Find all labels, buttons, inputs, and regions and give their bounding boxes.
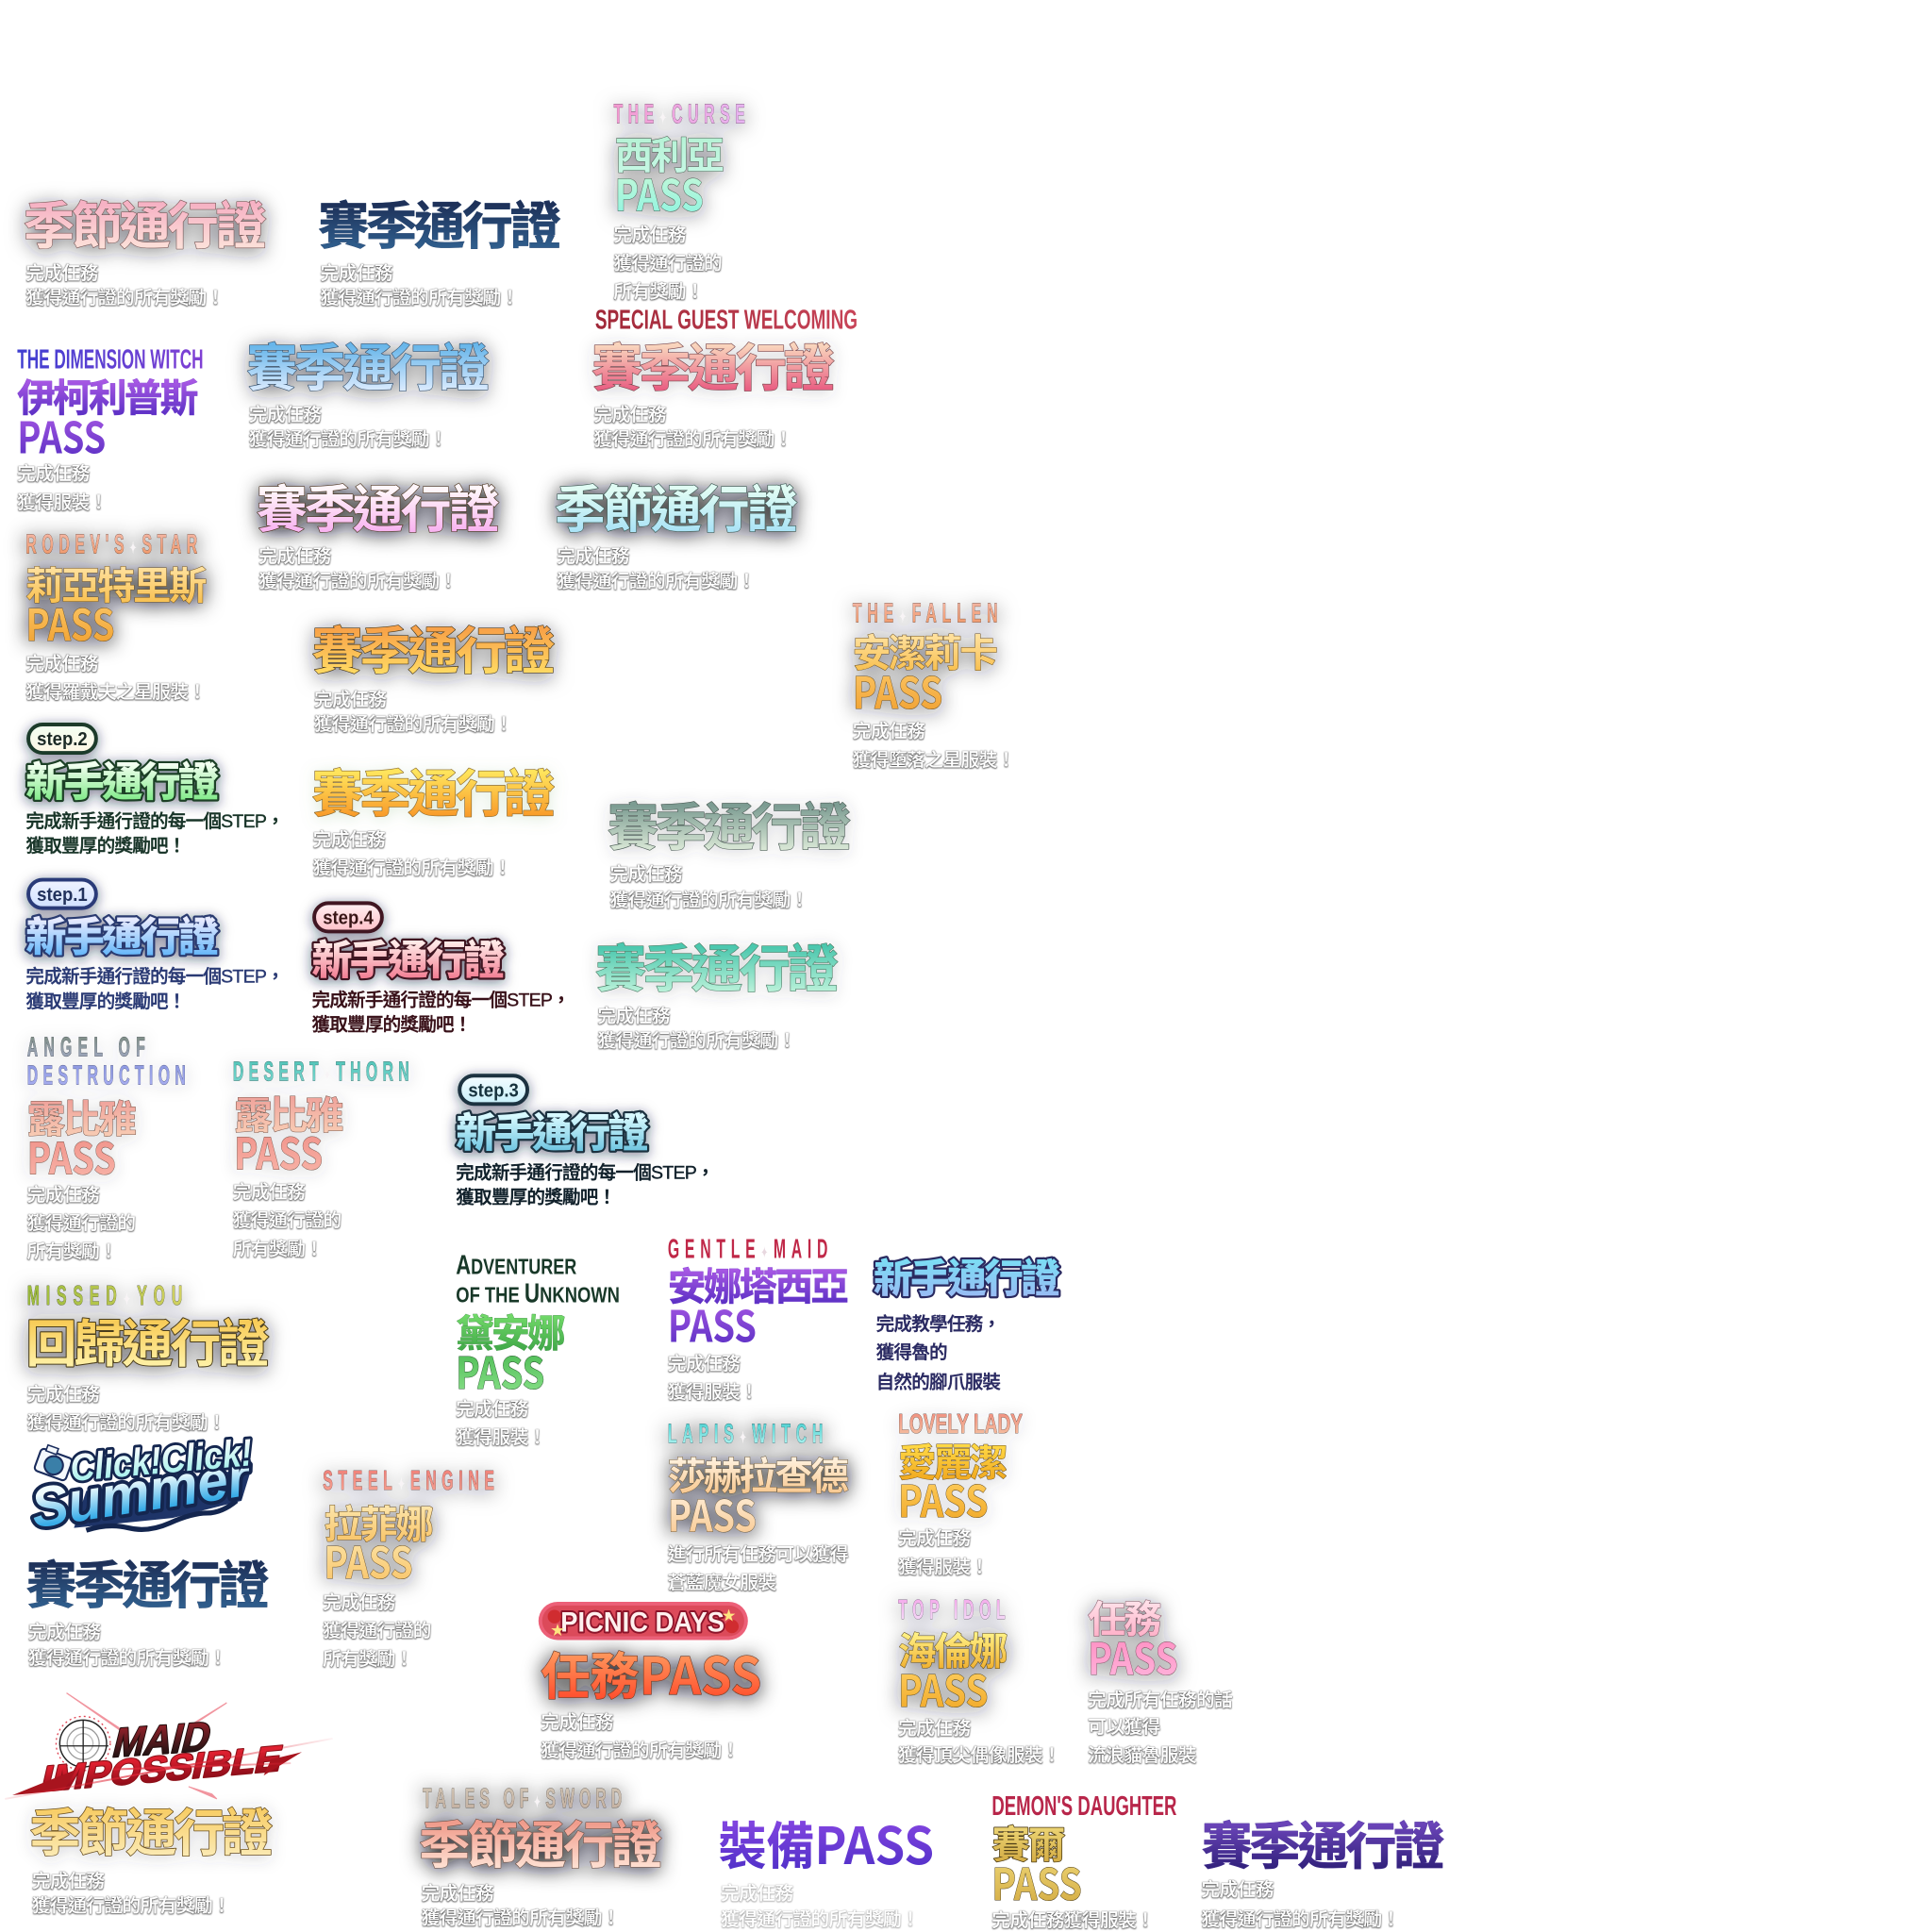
description: 完成任務	[898, 1718, 972, 1739]
description: 獲得通行證的所有獎勵！	[610, 891, 808, 911]
description: 獲取豐厚的獎勵吧！	[456, 1187, 615, 1208]
heading group	[1088, 1598, 1178, 1688]
title: 新手通行證	[456, 1111, 649, 1157]
label: LOVELY LADY	[898, 1409, 1023, 1440]
heading group	[898, 1409, 1023, 1530]
description: 完成任務	[422, 1883, 494, 1904]
description: 流浪貓魯服裝	[1088, 1745, 1196, 1766]
pass word: PASS	[1088, 1625, 1178, 1688]
logo: click click summer	[26, 1430, 257, 1540]
label: RODEV'S ✦ STAR	[25, 528, 197, 559]
description: 完成任務	[898, 1528, 972, 1549]
description: 完成新手通行證的每一個STEP，	[25, 811, 284, 832]
heading group	[25, 880, 219, 960]
heading group	[668, 1418, 848, 1545]
description: 完成所有任務的話	[1088, 1690, 1232, 1710]
heading: 季節通行證	[555, 482, 797, 539]
description: 完成任務	[1201, 1879, 1274, 1900]
name: 愛麗潔	[898, 1441, 1007, 1485]
pass: the dimension witch	[17, 345, 204, 513]
heading group	[613, 99, 745, 224]
step badge	[28, 880, 96, 908]
pass: equipment pass	[718, 1805, 934, 1930]
name: 拉菲娜	[325, 1503, 433, 1546]
description: 獲得通行證的	[613, 253, 722, 274]
label: THE ✦ FALLEN	[853, 598, 998, 628]
description: 獲得通行證的所有獎勵！	[313, 858, 511, 879]
description: 獲得通行證的所有獎勵！	[249, 429, 447, 450]
description: 完成任務	[594, 405, 667, 425]
pass: step 3 beginner	[456, 1075, 714, 1208]
click text: Click!Click!	[69, 1430, 254, 1490]
name: 露比雅	[234, 1093, 342, 1137]
pass: angel of destruction	[27, 1031, 186, 1262]
label line 1: ADVENTURER	[456, 1251, 576, 1281]
description: 完成新手通行證的每一個STEP，	[25, 967, 284, 988]
pass: teal season pass	[595, 941, 839, 1052]
title: 新手通行證	[311, 939, 505, 984]
pass word: PASS	[668, 1483, 757, 1545]
description: 完成任務	[233, 1182, 306, 1203]
pass: navy season pass with summer logo	[25, 1557, 269, 1669]
description: 所有獎勵！	[233, 1239, 323, 1259]
description: 完成新手通行證的每一個STEP，	[311, 990, 570, 1010]
description: 獲得通行證的所有獎勵！	[27, 1412, 225, 1433]
label line 2: DESTRUCTION	[27, 1059, 186, 1091]
title: 回歸通行證	[25, 1316, 269, 1373]
name: 莎赫拉查德	[668, 1455, 848, 1498]
pass: aqua season pass	[555, 482, 797, 591]
name: 賽爾	[991, 1824, 1065, 1867]
wave	[86, 1501, 237, 1530]
description: 完成任務獲得服裝！	[991, 1910, 1155, 1931]
description: 完成任務	[25, 263, 99, 284]
description: 完成任務	[258, 546, 332, 567]
description: 獲得通行證的所有獎勵！	[597, 1031, 796, 1052]
pass: tutorial beginner pass	[874, 1257, 1060, 1392]
description: 完成任務	[27, 1384, 100, 1405]
label line 2: OF THE UNKNOWN	[456, 1279, 620, 1309]
step badge: step.3	[468, 1080, 519, 1101]
description: 獲得頂尖偶像服裝！	[898, 1745, 1060, 1766]
heading: 賽季通行證	[591, 341, 835, 397]
description: 完成任務	[323, 1592, 396, 1613]
pass word: PASS	[615, 161, 704, 224]
description: 獲得通行證的所有獎勵！	[321, 288, 519, 308]
pass: blue season pass	[246, 341, 490, 450]
logo badge: PICNIC DAYS	[560, 1607, 724, 1638]
impossible text: IMPOSSIBLE	[38, 1739, 286, 1800]
pass: mission pink	[1088, 1598, 1232, 1766]
name: 西利亞	[615, 134, 723, 177]
pass word: PASS	[456, 1340, 544, 1402]
description: 完成任務	[456, 1399, 529, 1420]
heading: 賽季通行證	[311, 767, 555, 824]
description: 獲得通行證的所有獎勵！	[28, 1648, 226, 1669]
description: 完成新手通行證的每一個STEP，	[456, 1162, 714, 1183]
description: 獲得通行證的所有獎勵！	[25, 288, 225, 308]
title: 新手通行證	[874, 1257, 1060, 1301]
description: 獲得通行證的所有獎勵！	[422, 1908, 620, 1929]
pass: picnic days	[539, 1602, 761, 1761]
name: 伊柯利普斯	[17, 376, 198, 420]
description: 可以獲得	[1088, 1717, 1160, 1738]
pass: lilac season pass	[257, 482, 499, 591]
pass: orange season pass	[311, 624, 555, 735]
pass: step 2 beginner	[25, 724, 284, 857]
description: 完成任務	[314, 690, 387, 710]
description: 獲得魯的	[876, 1342, 947, 1363]
description: 完成教學任務，	[876, 1314, 1000, 1335]
heading group	[27, 1031, 186, 1188]
name: 黛安娜	[456, 1312, 565, 1356]
pass word: PASS	[27, 1125, 116, 1188]
pass: the curse	[613, 99, 745, 302]
heading group	[323, 1465, 494, 1591]
title: 新手通行證	[25, 760, 219, 806]
pass word: PASS	[17, 405, 106, 467]
pass: lapis witch	[668, 1418, 848, 1593]
label: THE DIMENSION WITCH	[17, 345, 204, 375]
pass: missed you return pass	[25, 1280, 269, 1433]
heading group	[311, 903, 505, 984]
heading: 賽季通行證	[1201, 1819, 1444, 1875]
title: 季節通行證	[419, 1818, 662, 1874]
heading group	[419, 1783, 662, 1874]
pass: the fallen	[853, 598, 1015, 771]
name: 露比雅	[27, 1097, 135, 1141]
title: 任務PASS	[541, 1635, 761, 1709]
label: GENTLE ✦ MAID	[668, 1234, 827, 1264]
label: DEMON'S DAUGHTER	[991, 1791, 1177, 1822]
description: 獲得通行證的所有獎勵！	[721, 1909, 919, 1930]
description: 獲得通行證的所有獎勵！	[594, 429, 792, 450]
description: 獲得服裝！	[668, 1382, 758, 1403]
step badge	[314, 903, 382, 931]
pass word: PASS	[325, 1529, 413, 1591]
heading group	[456, 1075, 649, 1157]
description: 獲得通行證的所有獎勵！	[557, 571, 756, 591]
label: SPECIAL GUEST WELCOMING	[595, 306, 858, 336]
pass word: PASS	[234, 1121, 323, 1183]
pass word: PASS	[991, 1851, 1082, 1913]
description: 完成任務	[32, 1871, 105, 1891]
description: 所有獎勵！	[27, 1241, 117, 1262]
title: 裝備PASS	[718, 1805, 934, 1879]
label: STEEL ✦ ENGINE	[323, 1465, 494, 1495]
description: 完成任務	[28, 1622, 101, 1642]
pass word: PASS	[898, 1657, 989, 1720]
description: 完成任務	[557, 546, 630, 567]
description: 獲得羅戴夫之星服裝！	[25, 682, 207, 703]
streaks	[67, 1693, 226, 1799]
pass: gentle maid	[668, 1234, 847, 1403]
pass: lovely lady	[898, 1409, 1023, 1577]
pass: tales of sword	[419, 1783, 662, 1929]
label: TOP IDOL	[898, 1594, 1006, 1624]
description: 完成任務	[321, 263, 393, 284]
description: 完成任務	[597, 1006, 671, 1026]
heading group	[853, 598, 998, 722]
name: 安娜塔西亞	[668, 1265, 847, 1308]
pass word: PASS	[668, 1292, 757, 1355]
heading group	[25, 724, 219, 806]
description: 完成任務	[853, 722, 925, 742]
step badge	[459, 1075, 527, 1104]
pass: steel engine	[323, 1465, 494, 1670]
name: 安潔莉卡	[853, 632, 996, 675]
summer text: Summer	[26, 1444, 257, 1540]
heading group	[898, 1594, 1008, 1720]
description: 所有獎勵！	[613, 281, 704, 302]
description: 完成任務	[541, 1712, 614, 1733]
maid text: MAID	[108, 1714, 216, 1766]
description: 獲得通行證的所有獎勵！	[541, 1740, 740, 1761]
description: 獲得通行證的所有獎勵！	[258, 571, 458, 591]
heading: 季節通行證	[24, 199, 267, 256]
pass word: PASS	[853, 659, 942, 722]
description: 進行所有任務可以獲得	[668, 1544, 848, 1565]
description: 獲取豐厚的獎勵吧！	[25, 836, 186, 857]
name: 莉亞特里斯	[25, 564, 207, 608]
pass: purple season pass	[1201, 1819, 1444, 1930]
heading: 賽季通行證	[595, 941, 839, 998]
description: 完成任務	[25, 654, 99, 675]
logo: maid impossible	[5, 1693, 333, 1800]
description: 獲得服裝！	[456, 1427, 546, 1448]
label: MISSED ✦ YOU	[27, 1280, 182, 1310]
name: 任務	[1088, 1598, 1161, 1641]
step badge: step.4	[323, 908, 374, 929]
description: 完成任務	[668, 1354, 741, 1374]
label: TALES OF ✦SWORD	[423, 1783, 622, 1813]
description: 獲得通行證的	[27, 1213, 135, 1234]
description: 完成任務	[249, 405, 322, 425]
heading group	[233, 1056, 409, 1183]
pass: step 1 beginner	[25, 880, 284, 1012]
pass word: PASS	[25, 591, 114, 654]
pass: rodev's star	[25, 528, 207, 703]
logo badge: ★	[722, 1609, 736, 1624]
description: 完成任務	[610, 864, 683, 885]
description: 獲得通行證的所有獎勵！	[1201, 1909, 1400, 1930]
label: LAPIS ✦ WITCH	[668, 1418, 823, 1449]
label: DESERT ✦THORN	[233, 1056, 409, 1087]
heading: 季節通行證	[29, 1806, 273, 1862]
description: 完成任務	[613, 225, 687, 245]
description: 完成任務	[313, 830, 386, 851]
pass: top idol	[898, 1594, 1060, 1766]
navy backing	[74, 1469, 251, 1528]
heading group	[25, 1280, 269, 1373]
description: 獲取豐厚的獎勵吧！	[25, 991, 186, 1012]
long streaks	[5, 1739, 333, 1799]
title: 新手通行證	[25, 915, 219, 960]
pass: gold season pass	[29, 1806, 273, 1916]
label: THE ✦ CURSE	[613, 99, 745, 129]
pass word: PASS	[898, 1468, 989, 1530]
heading: 賽季通行證	[257, 482, 499, 539]
description: 獲取豐厚的獎勵吧！	[311, 1015, 472, 1036]
pass: demon's daughter	[991, 1791, 1177, 1931]
description: 蒼藍魔女服裝	[668, 1573, 776, 1593]
step badge	[28, 724, 96, 753]
pass: navy season pass	[318, 199, 561, 308]
description: 獲得通行證的所有獎勵！	[314, 714, 512, 735]
heading: 賽季通行證	[318, 199, 561, 256]
icon: camera	[34, 1443, 75, 1481]
pass: step 4 beginner	[311, 903, 570, 1036]
description: 完成任務	[27, 1185, 100, 1206]
description: 獲得墮落之星服裝！	[853, 750, 1015, 771]
pass: special guest welcoming	[591, 306, 858, 450]
label line 1: ANGEL OF	[27, 1031, 145, 1062]
step badge: step.2	[37, 729, 88, 750]
heading: 賽季通行證	[608, 800, 851, 857]
step badge: step.1	[37, 885, 88, 906]
pass: adventurer of the unknown	[456, 1251, 620, 1448]
description: 獲得通行證的	[233, 1210, 341, 1231]
name: 海倫娜	[898, 1630, 1008, 1674]
heading: 賽季通行證	[246, 341, 490, 397]
description: 獲得服裝！	[17, 492, 108, 513]
description: 自然的腳爪服裝	[876, 1371, 1000, 1392]
description: 獲得服裝！	[898, 1557, 989, 1577]
heading group	[25, 528, 207, 654]
heading: 賽季通行證	[311, 624, 555, 680]
heading: 賽季通行證	[25, 1557, 269, 1614]
spikes	[12, 1752, 302, 1795]
description: 獲得通行證的所有獎勵！	[32, 1895, 230, 1916]
pass: pink season pass	[24, 199, 267, 308]
description: 完成任務	[721, 1883, 793, 1904]
pass: yellow season pass	[311, 767, 555, 879]
description: 所有獎勵！	[323, 1649, 413, 1670]
pass: sage season pass	[608, 800, 851, 911]
description: 獲得通行證的	[323, 1621, 431, 1641]
reticle	[56, 1716, 110, 1771]
description: 完成任務	[17, 464, 91, 485]
logo badge: ★	[551, 1624, 564, 1639]
pass: desert thorn	[233, 1056, 409, 1259]
